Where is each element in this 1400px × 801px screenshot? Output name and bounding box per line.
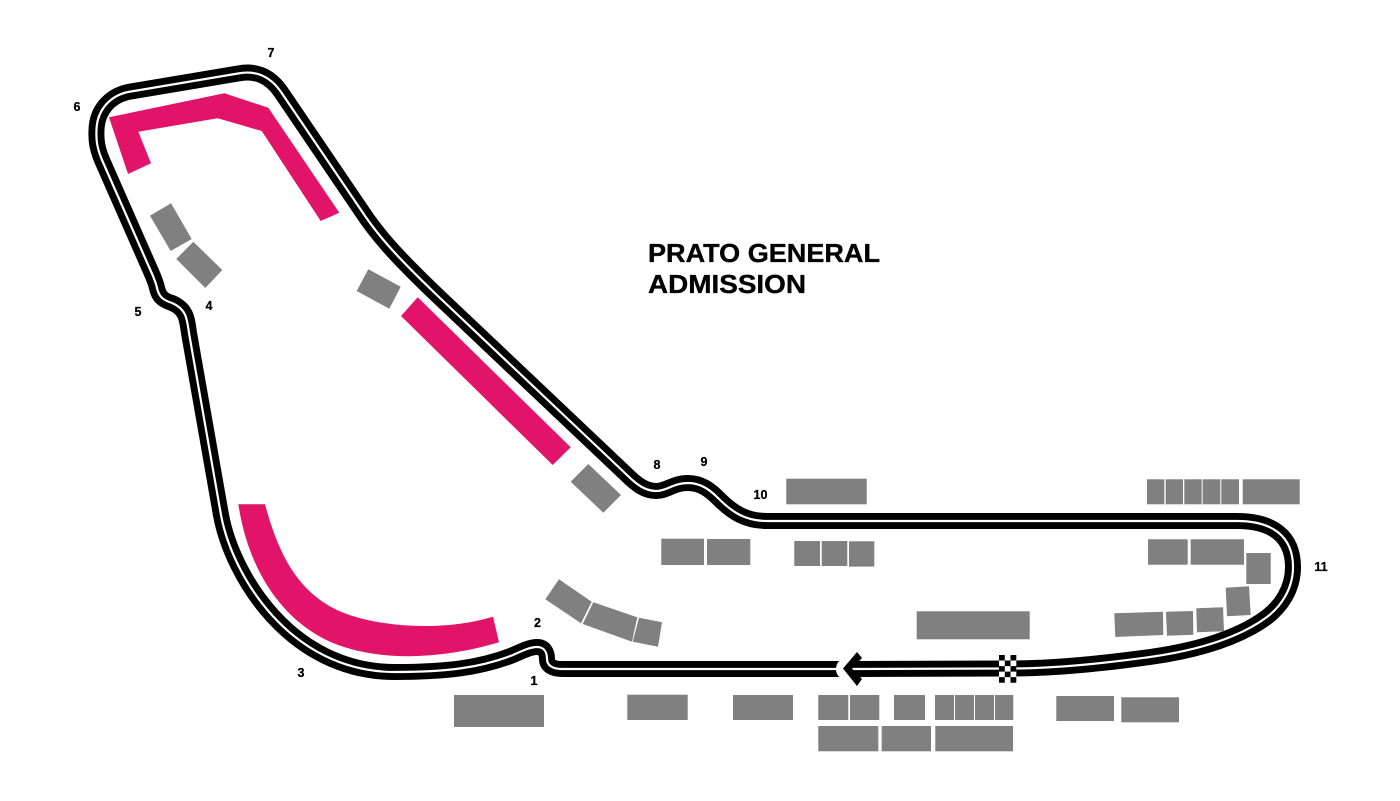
pink zones: Prato general admission [109, 93, 571, 656]
pink zone: Parabolica [238, 504, 499, 656]
turn numbers: 3 [298, 666, 305, 680]
turn numbers: 11 [1314, 560, 1328, 574]
pink zone: back straight [401, 297, 571, 465]
turn numbers [74, 46, 1328, 688]
turn numbers: 9 [701, 455, 708, 469]
title: PRATO GENERAL [648, 240, 880, 268]
turn numbers: 8 [654, 458, 661, 472]
grey grandstands [150, 203, 1300, 751]
turn numbers: 1 [531, 674, 538, 688]
turn numbers: 7 [268, 46, 275, 60]
track centre white line [96, 73, 1293, 672]
start finish chequered flag [999, 655, 1016, 683]
title [648, 240, 880, 299]
turn numbers: 4 [206, 299, 213, 313]
track [96, 73, 1293, 672]
turn numbers: 2 [534, 616, 541, 630]
direction arrow [836, 652, 862, 686]
track outer black band [96, 73, 1293, 672]
pink zone: turn 6 to 7 [109, 93, 339, 221]
title: ADMISSION [648, 271, 806, 299]
turn numbers: 6 [74, 100, 81, 114]
turn numbers: 10 [754, 488, 767, 502]
turn numbers: 5 [135, 305, 142, 319]
